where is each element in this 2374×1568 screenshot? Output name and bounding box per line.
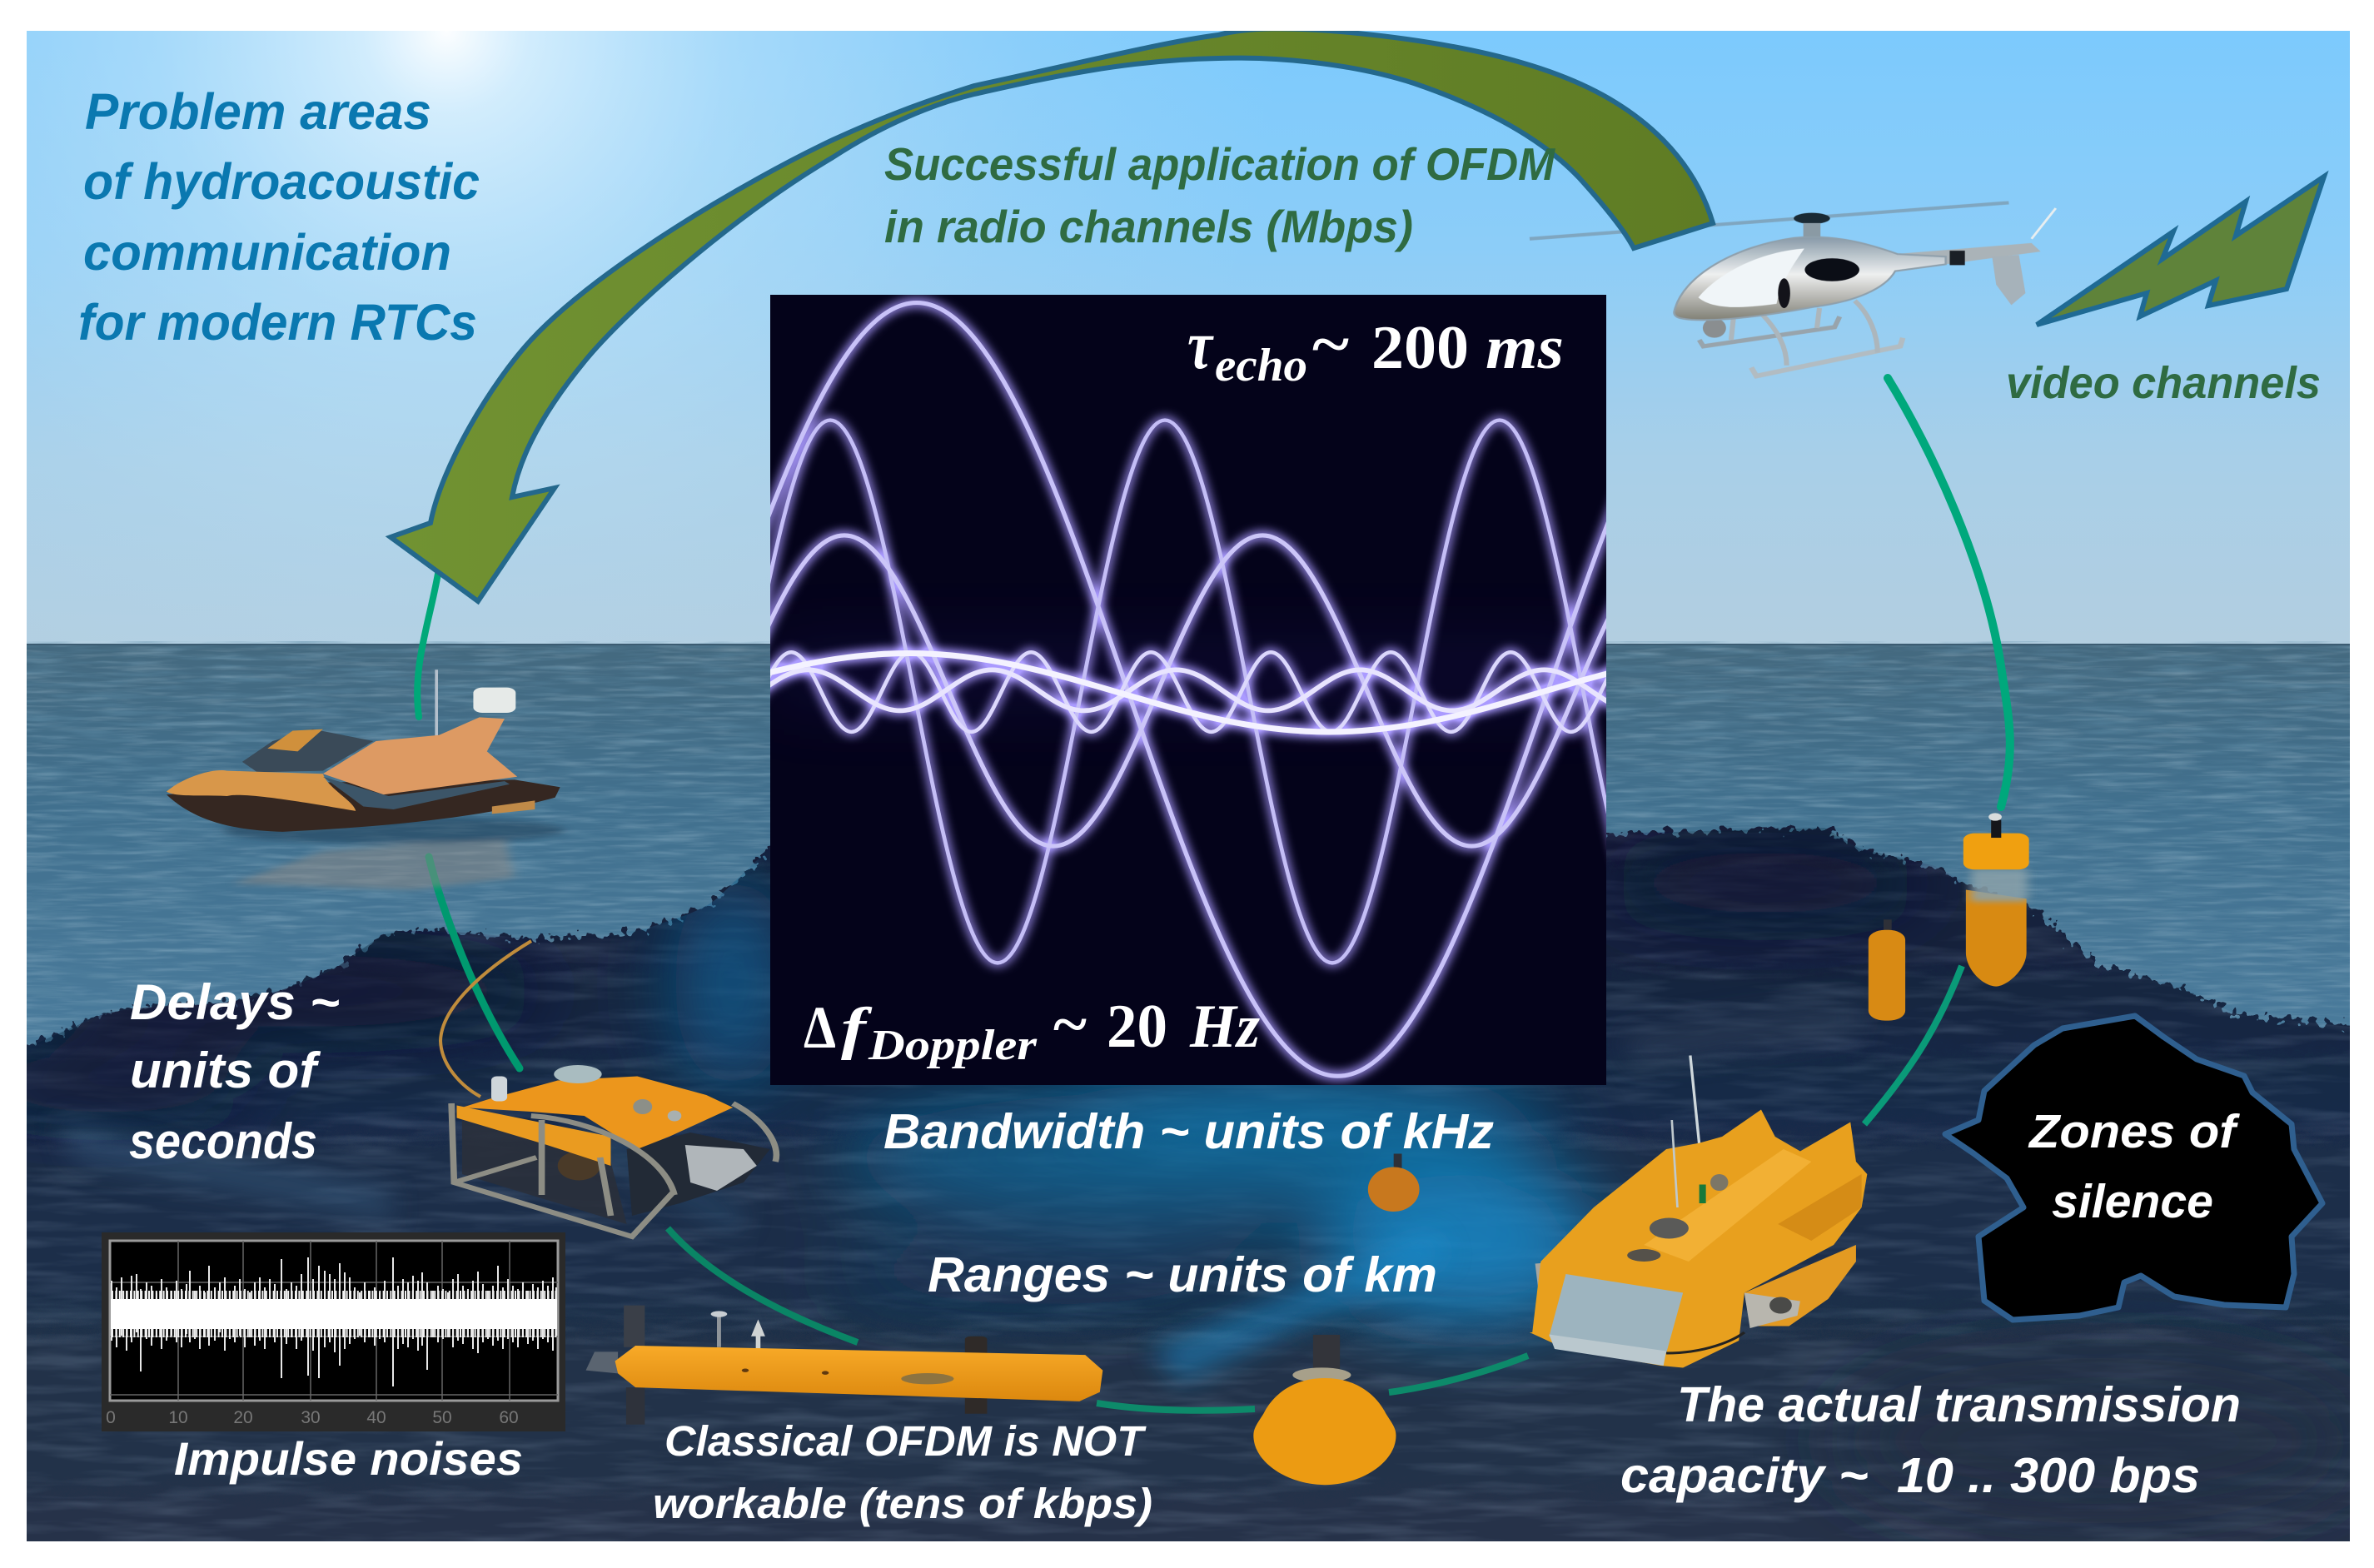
chart: interfering sine curves — [770, 295, 1606, 1085]
chart: impulse noise waveform: 50 — [432, 1408, 452, 1427]
text: delays: Delays ~ — [130, 974, 340, 1030]
icon: torpedo AUV — [586, 1306, 1102, 1425]
chart: impulse noise waveform: 40 — [366, 1408, 386, 1427]
text: impulse noises: Impulse noises — [174, 1432, 523, 1485]
chart: impulse noise waveform: 10 — [168, 1408, 188, 1427]
text: classical OFDM not workable: Classical OFDM is NOT — [664, 1417, 1147, 1465]
green link: seabed buoy to torpedo AUV — [1097, 1403, 1255, 1411]
icon: ROV — [451, 1065, 776, 1237]
text: successful OFDM in radio channels: in radio channels (Mbps) — [884, 201, 1413, 252]
text: video channels: video channels — [2006, 358, 2321, 408]
formula: Doppler shift — [804, 991, 1260, 1069]
text: delays: seconds — [129, 1113, 317, 1169]
callout: zones of silence: silence — [2052, 1175, 2213, 1228]
formula: echo delay: echo — [1215, 340, 1307, 391]
formula: echo delay: ms — [1486, 314, 1564, 382]
green link: jet ski to ROV — [429, 857, 520, 1068]
heading: problem areas — [78, 83, 480, 351]
text: bandwidth: Bandwidth ~ units of kHz — [883, 1104, 1495, 1159]
formula: Doppler shift: Hz — [1189, 993, 1260, 1061]
formula: Doppler shift: Doppler — [868, 1022, 1038, 1069]
panel: multipath waveforms — [487, 295, 1759, 1085]
text: ranges: Ranges ~ units of km — [928, 1247, 1437, 1302]
green link: arrow head to jet ski — [417, 574, 438, 717]
formula: echo delay — [1187, 306, 1564, 391]
icon: secondary buoy — [1869, 919, 1905, 1021]
text: successful OFDM in radio channels: Successful application of OFDM — [884, 138, 1555, 190]
formula: echo delay: τ — [1187, 306, 1214, 384]
formula: echo delay: 200 — [1371, 314, 1469, 382]
text: actual transmission capacity — [1620, 1377, 2241, 1503]
heading: problem areas: communication — [83, 224, 451, 281]
callout: zones of silence — [1945, 1016, 2322, 1320]
big curved green arrow — [391, 28, 1713, 601]
heading: problem areas: of hydroacoustic — [83, 153, 480, 210]
chart: impulse noise waveform: 30 — [301, 1408, 321, 1427]
formula: Doppler shift: ~ — [1053, 991, 1087, 1058]
green link: ROV to torpedo AUV — [668, 1228, 858, 1342]
icon: seabed buoy — [1253, 1335, 1396, 1485]
icon: helicopter drone — [1530, 202, 2056, 376]
chart: impulse noise waveform — [102, 1232, 565, 1431]
chart: impulse noise waveform: 0 — [106, 1408, 116, 1427]
text: actual transmission capacity: The actual transmission — [1677, 1377, 2241, 1432]
icon: small distant buoy — [1368, 1153, 1420, 1212]
green link: helicopter to surface buoy — [1888, 378, 2010, 807]
text: delays — [129, 974, 340, 1169]
heading: problem areas: for modern RTCs — [78, 294, 477, 351]
formula: Doppler shift: Δ — [804, 994, 836, 1061]
text: classical OFDM not workable — [653, 1417, 1152, 1527]
green link: catamaran vehicle to seabed buoy — [1389, 1356, 1528, 1392]
formula: echo delay: ~ — [1312, 311, 1350, 379]
text: successful OFDM in radio channels — [884, 138, 1555, 252]
text: classical OFDM not workable: workable (tens of kbps) — [653, 1480, 1152, 1527]
text: delays: units of — [130, 1043, 321, 1098]
text: actual transmission capacity: capacity ~ 10 .. 300 bps — [1620, 1448, 2200, 1503]
chart: impulse noise waveform: 60 — [499, 1408, 519, 1427]
icon: lightning bolt — [2037, 177, 2324, 325]
heading: problem areas: Problem areas — [85, 83, 431, 140]
chart: impulse noise waveform: 20 — [233, 1408, 253, 1427]
icon: catamaran AUV — [1530, 1056, 1867, 1367]
formula: Doppler shift: 20 — [1107, 993, 1167, 1061]
formula: Doppler shift: f — [841, 997, 873, 1061]
green link: surface buoy to catamaran vehicle — [1864, 966, 1962, 1124]
orange ROV tether — [440, 941, 531, 1097]
icon: surface buoy — [1963, 813, 2029, 987]
icon: jet ski surface vehicle — [167, 670, 565, 889]
callout: zones of silence: Zones of — [2028, 1105, 2240, 1158]
